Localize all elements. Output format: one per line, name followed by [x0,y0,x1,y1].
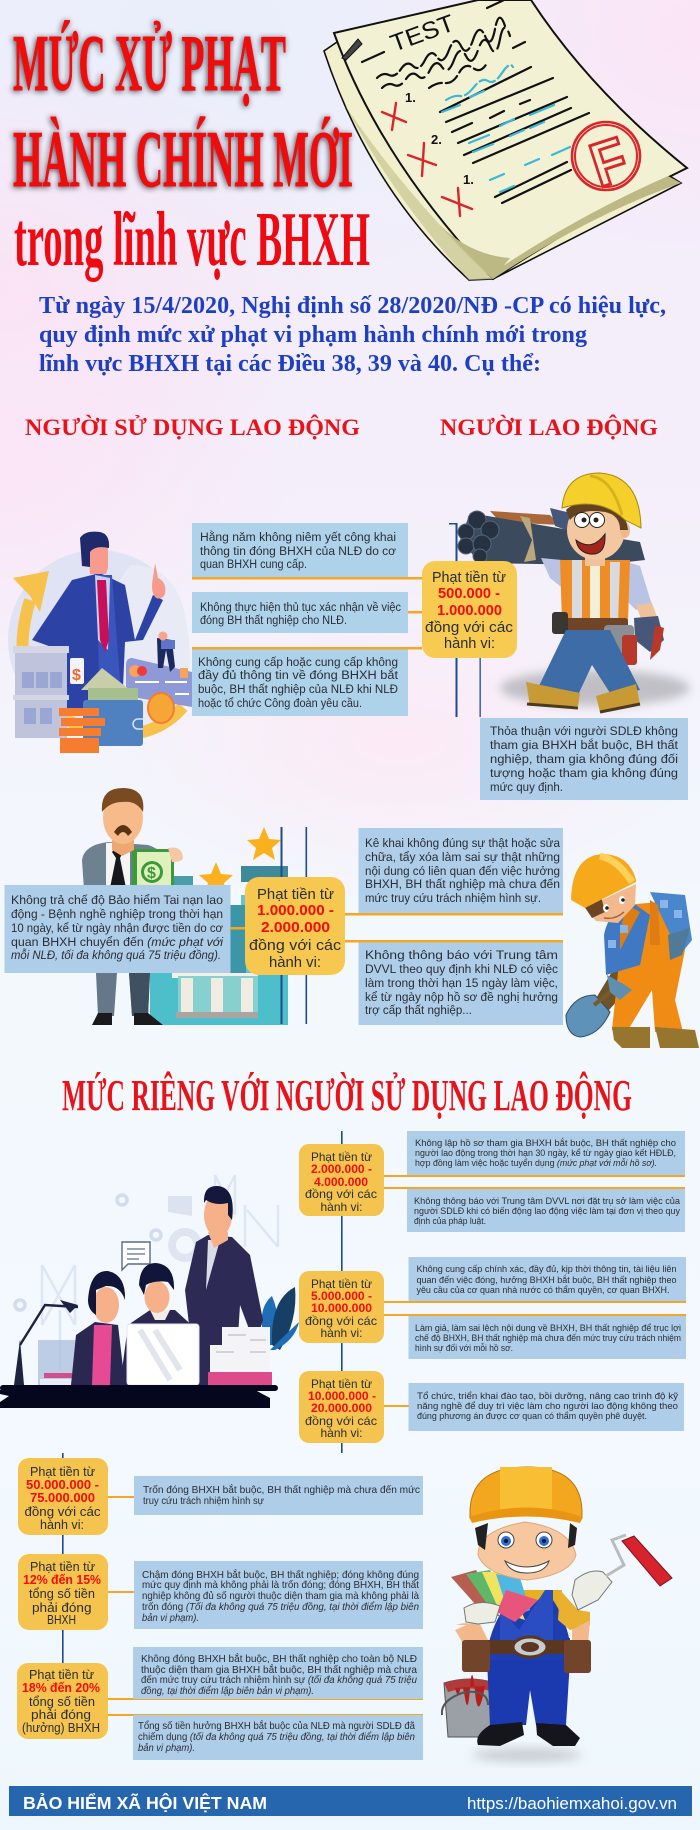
panel: late payment: bản vi phạm). [142,1612,199,1624]
badge: fine 18-20%: tổng số tiền [29,1695,95,1709]
badge: fine 12-15% [18,1554,108,1630]
panel: late payment: mức quy định mà không phải là trốn đóng; đóng BHXH, BH thất [142,1579,419,1591]
panel: incomplete information: Không cung cấp chính xác, đầy đủ, kịp thời thông tin, tài liệu liên [416,1264,676,1275]
panel: false declaration: mức truy cứu trách nhiệm hình sự. [365,891,541,905]
panel: occupational accident: 10 ngày, kể từ ngày nhận được tiền do cơ [11,921,223,935]
badge: fine 2.000.000: 2.000.000 - [311,1162,372,1176]
footer [9,1786,692,1816]
panel: non-payment: đến mức truy cứu trách nhiệm hình sự (tối đa không quá 75 triệu [141,1674,417,1686]
panel: evasion: truy cứu trách nhiệm hình sự [143,1496,264,1507]
badge: fine 500.000: 1.000.000 [437,602,502,619]
icon: test paper: 1. [405,90,416,105]
footer: https://baohiemxahoi.gov.vn [467,1794,677,1813]
panel: appropriated benefits [133,1715,423,1760]
panel: annual disclosure: thông tin đóng BHXH của NLĐ do cơ [200,544,396,558]
badge: fine 12-15%: tổng số tiền [29,1587,95,1601]
badge: fine 18-20% [17,1663,108,1739]
panel: agreement: tượng hoặc tham gia không đúng [490,766,678,780]
badge: fine 18-20%: (hưởng) BHXH [22,1721,100,1735]
panel: agreement: mức quy định. [490,780,563,794]
connectors: section 2 timeline [62,1131,343,1663]
panel: employment center notice [358,942,563,1025]
panel: information to unions: hoặc tổ chức Công đoàn yêu cầu. [198,696,362,710]
connectors: fine 1 [192,577,422,650]
panel: falsified content: Làm giả, làm sai lệch nội dung về BHXH, BH thất nghiệp để trục lợi [415,1323,681,1334]
badge: fine 2.000.000: đồng với các [305,1187,377,1201]
panel: occupational accident: Không trả chế độ Bảo hiểm Tai nạn lao [11,893,223,907]
badge: fine 2.000.000: Phạt tiền từ [311,1150,372,1164]
panel: occupational accident: động - Bệnh nghề nghiệp trong thời hạn [11,907,223,921]
panel: no notice: Không thông báo với Trung tâm DVVL nơi đặt trụ sở làm việc của [414,1196,681,1207]
illustration: businessman: $ [72,667,81,684]
panel: information to unions: Không cung cấp hoặc cung cấp không [198,655,398,669]
badge: fine 1.000.000 [245,877,345,975]
panel: employment center notice: trợ cấp thất nghiệp... [365,1003,472,1017]
connectors: fine 2 right [345,913,563,942]
panel: unemployment confirmation [192,592,408,633]
badge: fine 12-15%: phải đóng [32,1601,92,1615]
panel: non-payment [133,1647,423,1699]
badge: fine 10.000.000: 10.000.000 - [308,1389,376,1403]
panel: no registration [407,1131,685,1176]
panel: appropriated benefits: bản vi phạm). [138,1742,195,1754]
badge: fine 1.000.000: đồng với các [249,937,342,954]
panel: no notice: người SDLĐ khi có biến động lao động việc làm tại đơn vị theo quy [414,1206,680,1217]
panel: annual disclosure: Hằng năm không niêm yết công khai [200,529,396,544]
badge: fine 2.000.000: hành vi: [320,1200,362,1214]
panel: incomplete information: yêu cầu của cơ quan nhà nước có thẩm quyền, cơ quan BHXH. [416,1285,670,1296]
badge: fine 2.000.000 [299,1144,384,1216]
panel: unemployment confirmation: đóng BH thất nghiệp cho NLĐ. [200,613,347,627]
badge: fine 500.000: 500.000 - [438,585,500,602]
panel: occupational accident [4,885,230,973]
badge: fine 50.000.000: 75.000.000 [30,1491,95,1505]
intro paragraph [39,293,666,377]
panel: annual disclosure: quan BHXH cung cấp. [200,557,307,571]
illustration: manager with cash [82,788,288,1025]
panel: false declaration: BHXH, BH thất nghiệp mà chưa đến [365,877,560,891]
panel: no registration: hợp đồng làm việc hoặc tuyển dụng (mức phạt với mỗi hồ sơ). [415,1158,657,1169]
badge: fine 18-20%: 18% đến 20% [22,1681,100,1695]
panel: late payment: Chậm đóng BHXH bắt buộc, BH thất nghiệp; đóng không đúng [142,1568,419,1581]
icon: test paper [324,0,687,280]
badge: fine 10.000.000: Phạt tiền từ [311,1377,372,1391]
icon: test paper: TEST [387,10,458,58]
badge: fine 1.000.000: hành vi: [269,954,321,971]
panel: training: đúng phương án được cơ quan có thẩm quyền phê duyệt. [417,1411,647,1422]
panel: evasion [134,1476,423,1515]
panel: false declaration: nội dung có liên quan đến việc hưởng [365,864,560,878]
badge: fine 5.000.000 [299,1271,384,1343]
illustration: office team [0,1175,299,1408]
panel: late payment [134,1561,423,1629]
badge: fine 500.000 [422,561,517,658]
panel: occupational accident: quan BHXH chuyển đến (mức phạt với [11,935,223,949]
connectors: section 2 orange [108,1175,686,1716]
badge: fine 18-20%: Phạt tiền từ [29,1668,95,1682]
badge: fine 1.000.000: 1.000.000 - [257,902,334,919]
panel: no registration: người lao động trong thời hạn 30 ngày, kể từ ngày giao kết HĐLĐ, [415,1148,676,1159]
panel: falsified content [408,1315,686,1359]
illustration: worker carrying pipes [458,473,690,712]
panel: appropriated benefits: chiếm dụng (tối đa không quá 75 triệu đồng, tại thời điểm lập biên [138,1731,415,1743]
badge: fine 1.000.000: 2.000.000 [261,919,330,936]
badge: fine 500.000: hành vi: [444,635,495,652]
badge: fine 5.000.000: 5.000.000 - [311,1289,372,1303]
badge: fine 12-15%: 12% đến 15% [23,1573,101,1587]
panel: evasion: Trốn đóng BHXH bắt buộc, BH thất nghiệp mà chưa đến mức [143,1483,420,1496]
illustration: businessman [8,532,192,753]
panel: training [408,1383,684,1431]
panel: agreement: nghiệp, tham gia không đúng đối [490,752,678,766]
panel: agreement: Thỏa thuận với người SDLĐ không [490,724,678,738]
badge: fine 18-20%: phải đóng [31,1708,91,1722]
panel: non-payment: thuộc diện tham gia BHXH bắt buộc, BH thất nghiệp mà chưa [141,1663,417,1676]
illustration: painter [442,1467,672,1762]
panel: information to unions: đầy đủ thông tin về đóng BHXH bắt [198,667,399,682]
badge: fine 50.000.000: đồng với các [24,1505,100,1519]
panel: training: Tổ chức, triển khai đào tạo, bồi dưỡng, nâng cao trình độ kỹ [417,1391,678,1402]
panel: agreement [480,718,688,800]
badge: fine 10.000.000 [299,1371,384,1443]
badge: fine 5.000.000: hành vi: [320,1326,362,1340]
panel: no notice [407,1188,685,1232]
badge: fine 12-15%: BHXH [47,1613,76,1627]
panel: agreement: tham gia BHXH bắt buộc, BH thất [490,737,679,752]
illustration: worker with shovel [566,854,699,1048]
heading: employees: NGƯỜI LAO ĐỘNG [440,414,658,440]
panel: no notice: định của pháp luật. [414,1216,486,1227]
footer: BẢO HIỂM XÃ HỘI VIỆT NAM [23,1792,267,1813]
panel: unemployment confirmation: Không thực hiện thủ tục xác nhận về việc [200,600,401,614]
panel: false declaration: chữa, tẩy xóa làm sai sự thật những [365,850,560,864]
panel: non-payment: Không đóng BHXH bắt buộc, BH thất nghiệp cho toàn bộ NLĐ [141,1652,417,1665]
icon: test paper: 2. [431,132,442,147]
panel: late payment: nghiệp không đủ số người thuộc diện tham gia mà không phải là [142,1590,419,1602]
panel: occupational accident: mỗi NLĐ, tối đa không quá 75 triệu đồng). [11,947,221,962]
panel: employment center notice: làm trong thời hạn 15 ngày làm việc, [365,976,558,990]
intro paragraph: quy định mức xử phạt vi phạm hành chính mới trong [39,322,587,348]
title [13,18,370,282]
panel: training: năng nghề để duy trì việc làm cho người lao động không theo [417,1401,678,1412]
panel: late payment: trốn đóng (Tối đa không quá 75 triệu đồng, tại thời điểm lập biên [142,1601,419,1613]
panel: employment center notice: kể từ ngày nộp hồ sơ đề nghị hưởng [365,990,558,1004]
intro paragraph: lĩnh vực BHXH tại các Điều 38, 39 và 40. Cụ thể: [39,351,541,377]
badge: fine 5.000.000: 10.000.000 [311,1301,372,1315]
badge: fine 2.000.000: 4.000.000 [314,1175,368,1189]
title: MỨC XỬ PHẠT [13,18,286,108]
badge: fine 5.000.000: Phạt tiền từ [311,1277,372,1291]
icon: test paper: 1. [463,172,474,187]
panel: incomplete information: quan đến việc đóng, hưởng BHXH bắt buộc, BH thất nghiệp theo [416,1275,676,1286]
intro paragraph: Từ ngày 15/4/2020, Nghị định số 28/2020/NĐ -CP có hiệu lực, [39,293,666,319]
badge: fine 10.000.000: hành vi: [320,1426,362,1440]
heading: employers: NGƯỜI SỬ DỤNG LAO ĐỘNG [25,414,360,440]
panel: annual disclosure [192,523,408,578]
panel: information to unions: buộc, BH thất nghiệp của NLĐ khi NLĐ [198,682,398,696]
badge: fine 50.000.000 [18,1458,108,1535]
panel: employment center notice: DVVL theo quy định khi NLĐ có việc [365,962,558,976]
badge: fine 10.000.000: 20.000.000 [311,1401,372,1415]
connectors: section 1 vertical timelines [280,523,481,1024]
panel: false declaration [358,828,563,914]
panel: information to unions [192,648,408,716]
badge: fine 5.000.000: đồng với các [305,1314,377,1328]
panel: false declaration: Kê khai không đúng sự thật hoặc sửa [365,836,560,850]
badge: fine 500.000: Phạt tiền từ [432,569,506,586]
panel: appropriated benefits: Tổng số tiền hưởng BHXH bắt buộc của NLĐ mà người SDLĐ đã [138,1719,415,1732]
panel: incomplete information [408,1257,686,1302]
panel: non-payment: đồng, tại thời điểm lập biên bản vi phạm). [141,1685,314,1697]
panel: employment center notice: Không thông báo với Trung tâm [365,948,558,962]
badge: fine 500.000: đồng với các [425,619,514,636]
badge: fine 50.000.000: Phạt tiền từ [30,1465,96,1479]
connector: fine 2 left [230,927,246,930]
icon: test paper: F [582,125,636,201]
panel: no registration: Không lập hồ sơ tham gia BHXH bắt buộc, BH thất nghiệp cho [415,1138,676,1149]
illustration: manager with cash: $ [147,865,156,882]
badge: fine 50.000.000: 50.000.000 - [26,1478,99,1492]
badge: fine 1.000.000: Phạt tiền từ [257,886,334,903]
badge: fine 50.000.000: hành vi: [40,1518,84,1532]
badge: fine 12-15%: Phạt tiền từ [30,1560,96,1574]
badge: fine 10.000.000: đồng với các [305,1414,377,1428]
panel: falsified content: hình sự đối với mỗi hồ sơ. [415,1343,513,1354]
